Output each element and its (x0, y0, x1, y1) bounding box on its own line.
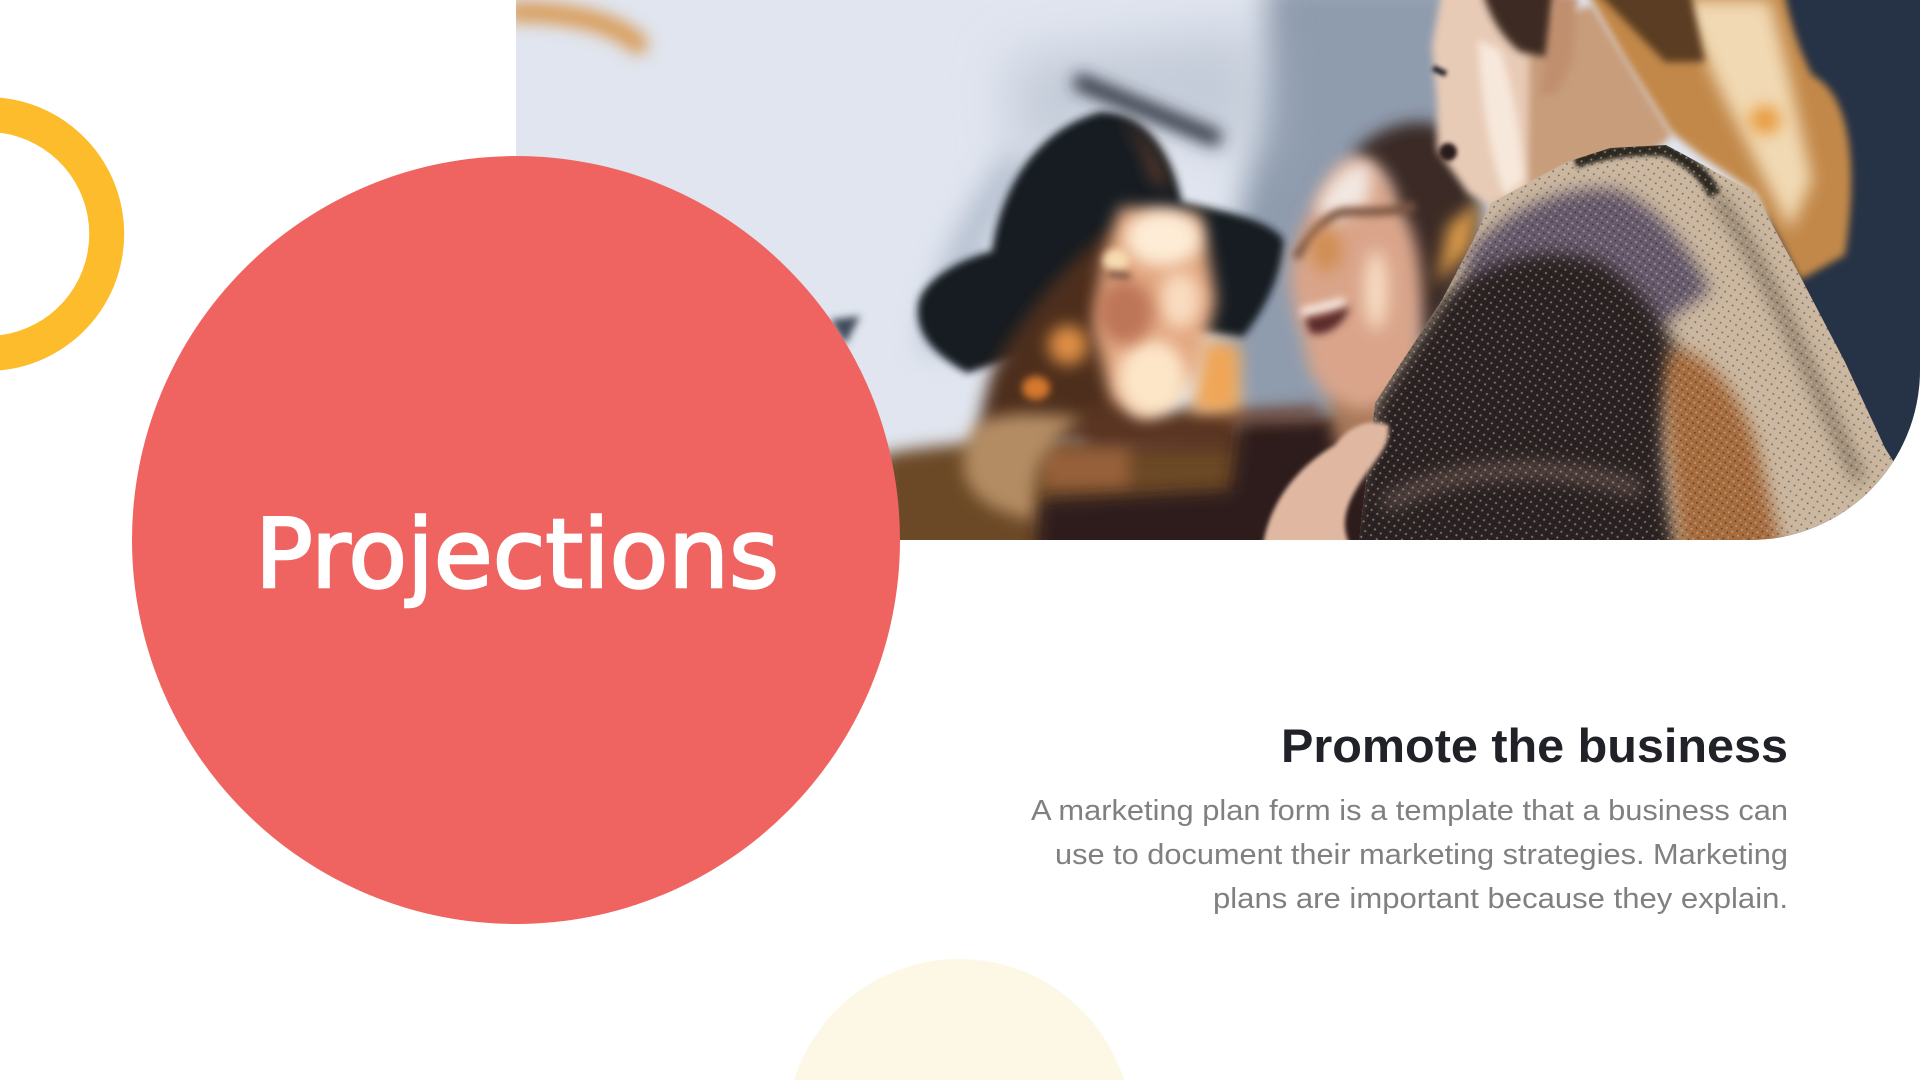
first woman: cheek highlight (1160, 272, 1200, 328)
first woman: brown crown glow (1120, 120, 1170, 190)
second woman: glasses (1296, 205, 1415, 258)
first woman: forehead highlight (1125, 210, 1201, 266)
second woman: cheek glow (1364, 250, 1388, 330)
cardigan: orange band (1666, 350, 1785, 560)
body text: A marketing plan form is a template that a business can (1031, 795, 1788, 827)
grey-blue background wall (1215, 0, 1480, 450)
first woman: face base (1094, 207, 1216, 418)
third woman: ponytail and hair (1580, 0, 1851, 280)
second woman: face (1291, 157, 1422, 410)
first woman: dark lower clothing (1035, 420, 1380, 560)
third woman: face (1432, 0, 1530, 205)
first woman: hat (918, 112, 1284, 373)
first woman: nose shade (1097, 280, 1153, 344)
first woman: blonde hair (964, 414, 1085, 520)
third woman: ear (1540, 0, 1578, 96)
photo: three women laughing (516, 0, 1920, 570)
first woman: shoulder edge (1225, 412, 1320, 418)
cardigan: lighter sleeve band (1385, 470, 1640, 505)
first woman: body (880, 420, 1340, 560)
second woman: forehead highlight (1318, 163, 1372, 225)
first woman: glowing hair right (1192, 340, 1240, 412)
first woman: hair (981, 225, 1135, 445)
first woman: chin highlight (1118, 340, 1186, 416)
body text (1031, 795, 1788, 915)
third woman: eyelash (1433, 68, 1446, 74)
third woman: neck (1490, 5, 1672, 205)
blurred dark streak (1075, 80, 1220, 140)
second woman: hair (1352, 122, 1479, 350)
first woman: chest (1040, 448, 1130, 490)
second woman: glowing hair (1436, 200, 1480, 285)
yellow ring (0, 98, 124, 370)
soft wall fold (935, 160, 1020, 350)
title: Projections (255, 500, 779, 610)
heading: Promote the business (1281, 719, 1788, 772)
orange streak (516, 12, 638, 44)
third woman: hair highlight (1680, 0, 1812, 230)
first woman: hair glow upper (1048, 325, 1088, 365)
second woman: mouth (1305, 306, 1350, 334)
first woman: neck shadow (1085, 408, 1240, 452)
second woman: neck (1322, 392, 1382, 448)
third woman: knit cardigan (1340, 130, 1920, 570)
cardigan: collar pattern (1575, 149, 1715, 195)
third woman: blonde strand (1478, 40, 1524, 195)
soft grey wash near hat (1010, 30, 1260, 170)
coral circle (132, 156, 900, 924)
second woman: lens glow (1310, 228, 1342, 272)
body text: plans are important because they explain. (1213, 883, 1788, 915)
third woman: earring (1439, 143, 1457, 161)
first woman: eye highlight (1103, 249, 1129, 271)
third woman: dark hair at temple (1482, 0, 1558, 58)
first woman: closed eye (1108, 274, 1130, 276)
cardigan: side stripe (1715, 195, 1860, 480)
body text: use to document their marketing strategies. Marketing (1055, 839, 1788, 871)
third woman: hair dark strands (1595, 0, 1705, 62)
first woman: hair glow lower (1022, 376, 1050, 400)
cardigan: dark sleeve (1340, 254, 1680, 560)
cardigan: knit texture (1340, 130, 1920, 570)
first woman's hand (1263, 422, 1389, 545)
second woman: teeth (1300, 297, 1345, 318)
small dark wedge beside circle (830, 316, 860, 345)
cardigan: purple shoulder (1450, 189, 1710, 340)
cream circle (794, 959, 1124, 1080)
third woman: bun highlight (1749, 106, 1781, 134)
dark background at right (1770, 0, 1920, 560)
